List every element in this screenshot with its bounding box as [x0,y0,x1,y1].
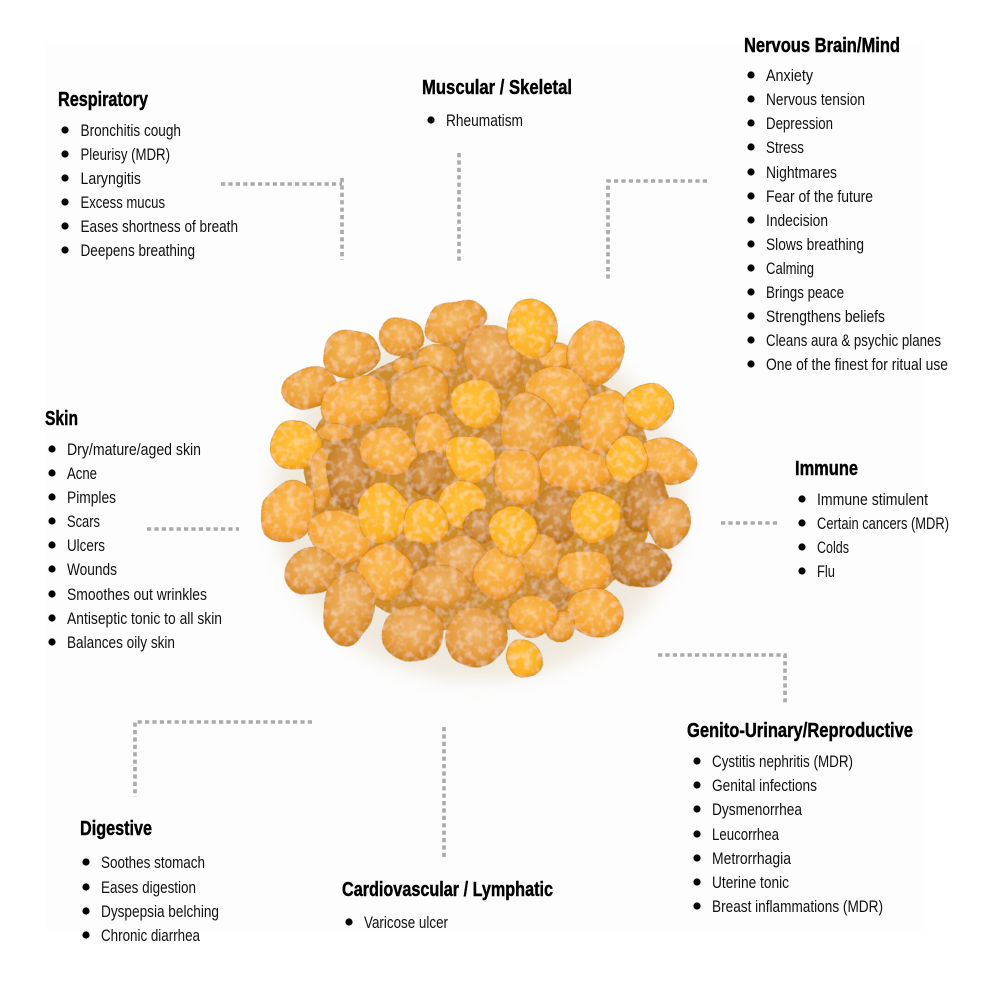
list: respiratory [61,122,238,260]
panel: nervous brain/mind [744,34,948,374]
heading: skin: Skin [45,407,78,430]
list: genito-urinary: Uterine tonic [712,874,789,892]
list: respiratory: Bronchitis cough [80,122,181,140]
list: nervous: Brings peace [766,284,844,302]
list: nervous: Stress [766,139,804,157]
panel: muscular / skeletal [422,76,572,130]
list: nervous: Nervous tension [766,91,865,109]
connector: genito-urinary [658,655,785,703]
panel: skin [45,407,222,652]
heading: digestive: Digestive [80,817,152,840]
heading: nervous brain/mind: Nervous Brain/Mind [744,34,900,57]
connector: immune [721,521,778,525]
list: skin [48,441,222,652]
list: genito-urinary: Genital infections [712,777,817,795]
list: nervous: Strengthens beliefs [766,308,885,326]
list: genito-urinary: Cystitis nephritis (MDR) [712,753,853,771]
list: genito-urinary: Breast inflammations (MDR) [712,898,883,916]
heading: immune: Immune [795,457,858,480]
list: respiratory: Excess mucus [80,194,165,212]
list: genito-urinary [693,753,883,916]
list: nervous: Fear of the future [766,188,873,206]
panel: respiratory [58,88,238,260]
list: nervous: Nightmares [766,164,837,182]
heading: muscular / skeletal: Muscular / Skeletal [422,76,572,99]
list: respiratory: Eases shortness of breath [80,218,238,236]
list: skin: Smoothes out wrinkles [67,586,207,604]
list: digestive: Chronic diarrhea [101,927,201,945]
connector: skin [147,527,239,531]
list: nervous: Indecision [766,212,828,230]
list: skin: Scars [67,513,100,531]
connector: cardiovascular [442,727,446,858]
list: immune: Colds [817,539,849,557]
list: nervous: Slows breathing [766,236,864,254]
connector: respiratory [221,178,342,260]
list: immune: Certain cancers (MDR) [817,515,949,533]
panel: genito-urinary / reproductive [687,719,913,916]
heading: respiratory: Respiratory [58,88,148,111]
list: muscular: Rheumatism [446,112,523,130]
heading: cardiovascular / lymphatic: Cardiovascular / Lymphatic [342,878,553,901]
connector: nervous [608,181,707,279]
list: nervous: One of the finest for ritual use [766,356,948,374]
list: skin: Dry/mature/aged skin [67,441,201,459]
list: nervous: Calming [766,260,814,278]
list: skin: Antiseptic tonic to all skin [67,610,222,628]
list: genito-urinary: Metrorrhagia [712,850,792,868]
list: digestive [82,854,219,945]
list: nervous: Cleans aura & psychic planes [766,332,941,350]
panel: cardiovascular / lymphatic [342,878,553,932]
list: skin: Wounds [67,561,117,579]
list: nervous: Anxiety [766,67,814,85]
list: cardiovascular [345,914,448,932]
panel: digestive [80,817,219,945]
list: immune [798,491,949,581]
list: muscular [427,112,523,130]
list: immune: Immune stimulent [817,491,928,509]
list: respiratory: Laryngitis [80,170,141,188]
list: skin: Balances oily skin [67,634,175,652]
list: digestive: Dyspepsia belching [101,903,219,921]
list: skin: Ulcers [67,537,105,555]
connector: muscular [457,153,461,262]
list: genito-urinary: Leucorrhea [712,826,780,844]
list: digestive: Soothes stomach [101,854,205,872]
list: skin: Acne [67,465,97,483]
list: genito-urinary: Dysmenorrhea [712,801,803,819]
list: skin: Pimples [67,489,116,507]
panel: immune [795,457,949,581]
list: respiratory: Pleurisy (MDR) [80,146,170,164]
list: cardiovascular: Varicose ulcer [364,914,448,932]
heading: genito-urinary / reproductive: Genito-Urinary/Reproductive [687,719,913,742]
list: respiratory: Deepens breathing [80,242,195,260]
list: nervous: Depression [766,115,833,133]
list: immune: Flu [817,563,835,581]
list: nervous [747,67,948,374]
list: digestive: Eases digestion [101,879,196,897]
image: pile of golden resin tears [251,293,701,680]
connector: digestive [135,722,312,797]
